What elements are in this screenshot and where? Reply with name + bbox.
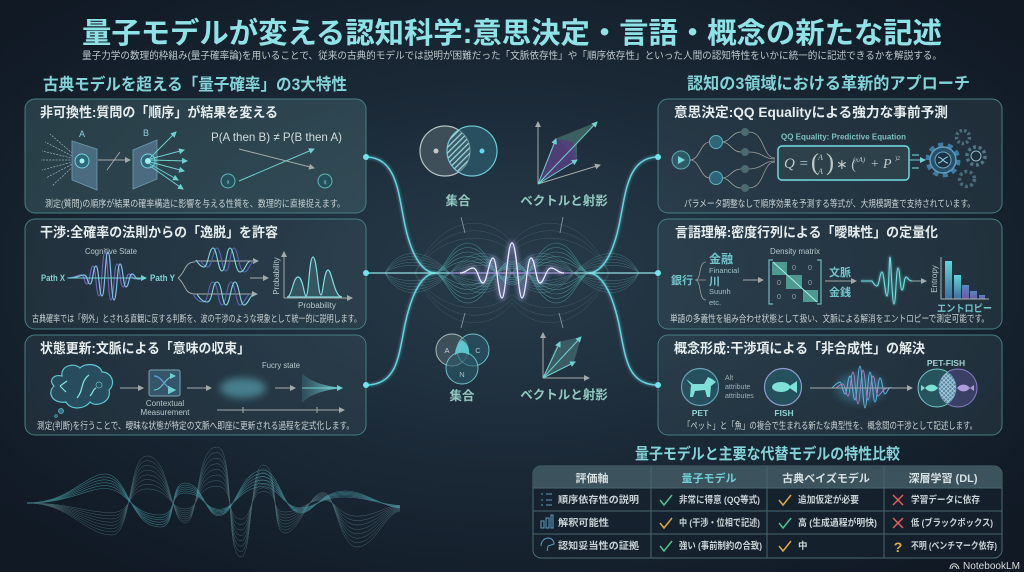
row: order dependence: 順序依存性の説明 (558, 494, 639, 506)
density matrix: 0 (792, 263, 796, 272)
comparison table heading: 量子モデルと主要な代替モデルの特性比較 (635, 444, 900, 463)
attribute labels: attributes (725, 393, 754, 400)
icon: pet (682, 368, 718, 418)
icon: measurement cards A and B: A (79, 129, 85, 139)
central bright wave (460, 243, 564, 298)
attribute labels: Alt (725, 375, 733, 382)
row: order dependence: 非常に得意 (QQ等式) (679, 494, 760, 506)
connector curves (366, 157, 658, 385)
caption: 測定(判断)を行うことで、曖昧な状態が特定の文脈へ即座に更新される過程を定式化します。 (37, 420, 354, 432)
row: cognitive validity: ? (894, 539, 902, 555)
collapse funnel (262, 361, 342, 403)
icon: vector projection (538, 122, 600, 184)
icon: thought cloud (51, 365, 113, 418)
interference wave (810, 366, 912, 408)
icon: three-set venn diagram: C (475, 346, 481, 355)
context labels: 金銭 (829, 285, 851, 299)
crossing arrows: a (227, 180, 230, 186)
equation box: ∗ ( (836, 158, 856, 173)
icon: contextual measurement: Measurement (141, 408, 190, 417)
faint wide arcs (415, 223, 609, 323)
density matrix: 0 (777, 292, 781, 301)
cognitive state wave: Cognitive State (85, 247, 138, 256)
icon: vector projection lower (543, 333, 589, 378)
entropy bar chart: エントロピー (937, 303, 992, 315)
panel: interference (25, 219, 366, 329)
subtitle: 量子力学の数理的枠組み(量子確率論)を用いることで、従来の古典的モデルでは説明が困難だった「文脈依存性」や「順序依存性」といった人間の認知特性をいかに統一的に記述できるかを解説する。 (82, 49, 942, 62)
table header (576, 471, 978, 485)
collapse funnel: Fucry state (262, 361, 301, 370)
row: order dependence (541, 494, 980, 506)
outer wave mesh (385, 254, 639, 292)
word senses: etc. (709, 298, 721, 307)
left section heading: 古典モデルを超える「量子確率」の3大特性 (43, 74, 347, 94)
panel heading: 干渉:全確率の法則からの「逸脱」を許容 (40, 224, 278, 240)
right section heading: 認知の3領域における革新的アプローチ (687, 74, 970, 93)
density matrix: Density matrix (770, 247, 820, 256)
icon: measurement cards A and B: B (143, 128, 149, 138)
word senses: 銀行 (671, 273, 693, 287)
equation box: ( (811, 150, 819, 176)
panel: non-commutativity (25, 99, 366, 213)
caption: 測定(質問)の順序が結果の確率構造に影響を与える性質を、数理的に直接捉えます。 (45, 198, 345, 210)
inner teal mesh (433, 243, 591, 303)
row: interpretability: 解釈可能性 (558, 517, 610, 529)
decision tree (672, 128, 775, 192)
word senses: Financial (709, 266, 739, 275)
context labels: 文脈 (829, 265, 851, 279)
icon: pet-fish venn (918, 358, 977, 407)
density matrix: 0 (808, 278, 812, 287)
row: interpretability: 中 (干渉・位相で記述) (679, 517, 760, 529)
arrow (120, 387, 143, 389)
label: sets lower: 集合 (449, 388, 475, 403)
equation box (778, 132, 909, 180)
row: cognitive validity: 強い (事前制約の合致) (679, 540, 762, 552)
NotebookLM logo: NotebookLM (963, 561, 1020, 572)
equation box: ) (826, 150, 834, 176)
context labels (825, 265, 856, 299)
panel: decision making (658, 99, 1002, 213)
probability chart: Probability (298, 301, 336, 310)
equation box: A (817, 153, 823, 162)
row: cognitive validity (541, 538, 997, 555)
wave family one (27, 447, 400, 557)
panel heading: 言語理解:密度行列による「曖昧性」の定量化 (675, 224, 938, 240)
row: cognitive validity: 認知妥当性の証拠 (558, 540, 640, 552)
icon: pet-fish venn: PET-FISH (927, 358, 965, 368)
arrow (187, 387, 211, 389)
icon: measurement cards A and B (41, 128, 187, 190)
fuzzy state blur (220, 378, 266, 398)
row: interpretability (541, 515, 993, 529)
branching waves (178, 248, 258, 305)
icon: gears (909, 130, 985, 186)
arrow (250, 277, 268, 279)
icon: two-set venn diagram (420, 126, 497, 176)
equation box: QQ Equality: Predictive Equation (781, 132, 906, 142)
comparison table (533, 466, 1002, 558)
icon: three-set venn diagram: A (444, 346, 450, 355)
cognitive state wave (41, 247, 176, 300)
label: vectors lower: ベクトルと射影 (520, 387, 608, 402)
probability chart (272, 252, 352, 310)
density matrix: 0 (777, 278, 781, 287)
wave family two (27, 470, 400, 527)
label: sets: 集合 (445, 193, 471, 208)
crossing arrows: q (324, 180, 327, 186)
panel: state update (25, 335, 366, 435)
central interference wave (366, 157, 658, 385)
row: order dependence: 学習データに依存 (911, 494, 980, 506)
formula: P(A then B) ≠ P(B then A) (211, 130, 342, 144)
equation box: Q = (784, 156, 809, 172)
row: order dependence: 追加仮定が必要 (798, 494, 859, 506)
row: cognitive validity: 不明 (ベンチマーク依存) (911, 540, 997, 552)
equation box: + P (870, 157, 892, 172)
density matrix (769, 247, 821, 304)
crossing arrows (221, 149, 332, 188)
equation box: (xA) (853, 156, 866, 164)
icon: fish: FISH (774, 408, 794, 418)
attribute labels: attribute (725, 384, 750, 391)
row: interpretability: 低 (ブラックボックス) (911, 517, 993, 529)
density matrix: 0 (792, 292, 796, 301)
timeline (217, 407, 344, 413)
icon: contextual measurement (141, 370, 190, 417)
panel heading: 非可換性:質問の「順序」が結果を変える (40, 104, 278, 120)
icon: three-set venn diagram: N (459, 370, 465, 379)
equation box: A (817, 167, 823, 176)
panel heading: 概念形成:干渉項による「非合成性」の解決 (674, 340, 925, 356)
word senses (671, 251, 739, 307)
arrow (275, 387, 295, 389)
decorative wave bottom left (27, 447, 400, 557)
table header: 深層学習 (DL) (908, 471, 978, 485)
arrow (743, 279, 763, 281)
panel: concept formation (658, 335, 1002, 435)
word senses: Suunh (709, 287, 731, 296)
panel heading: 意思決定:QQ Equalityによる強力な事前予測 (674, 104, 948, 120)
word senses: 川 (709, 276, 720, 288)
icon: contextual measurement: Contextual (146, 399, 184, 408)
label: vectors and projection: ベクトルと射影 (520, 193, 608, 208)
table header: 古典ベイズモデル (782, 471, 870, 485)
icon: pet: PET (692, 408, 709, 418)
icon: three-set venn diagram (436, 334, 489, 384)
caption: 古典確率では「例外」とされる直観に反する判断を、波の干渉のような現象として統一的に説明します。 (32, 313, 361, 325)
title: 量子モデルが変える認知科学:意思決定・言語・概念の新たな記述 (82, 16, 942, 50)
entropy bar chart (930, 257, 992, 315)
word senses: 金融 (709, 251, 733, 266)
cognitive state wave: Path Y (150, 273, 176, 284)
panel heading: 状態更新:文脈による「意味の収束」 (40, 340, 250, 356)
collapsing wave (861, 257, 926, 304)
icon: fish (764, 368, 802, 418)
cognitive state wave: Path X (41, 273, 66, 284)
equation box: )2 (895, 155, 900, 162)
row: interpretability: 高 (生成過程が明快) (798, 517, 877, 529)
table header: 評価軸 (576, 471, 608, 485)
panel: language understanding (658, 219, 1002, 329)
entropy bar chart: Entropy (930, 265, 939, 293)
attribute labels (725, 375, 754, 400)
connector node dots (363, 154, 661, 388)
row: cognitive validity: 中 (798, 540, 808, 552)
probability chart: Probability (272, 257, 281, 295)
density matrix: 0 (808, 263, 812, 272)
table header: 量子モデル (682, 471, 736, 485)
